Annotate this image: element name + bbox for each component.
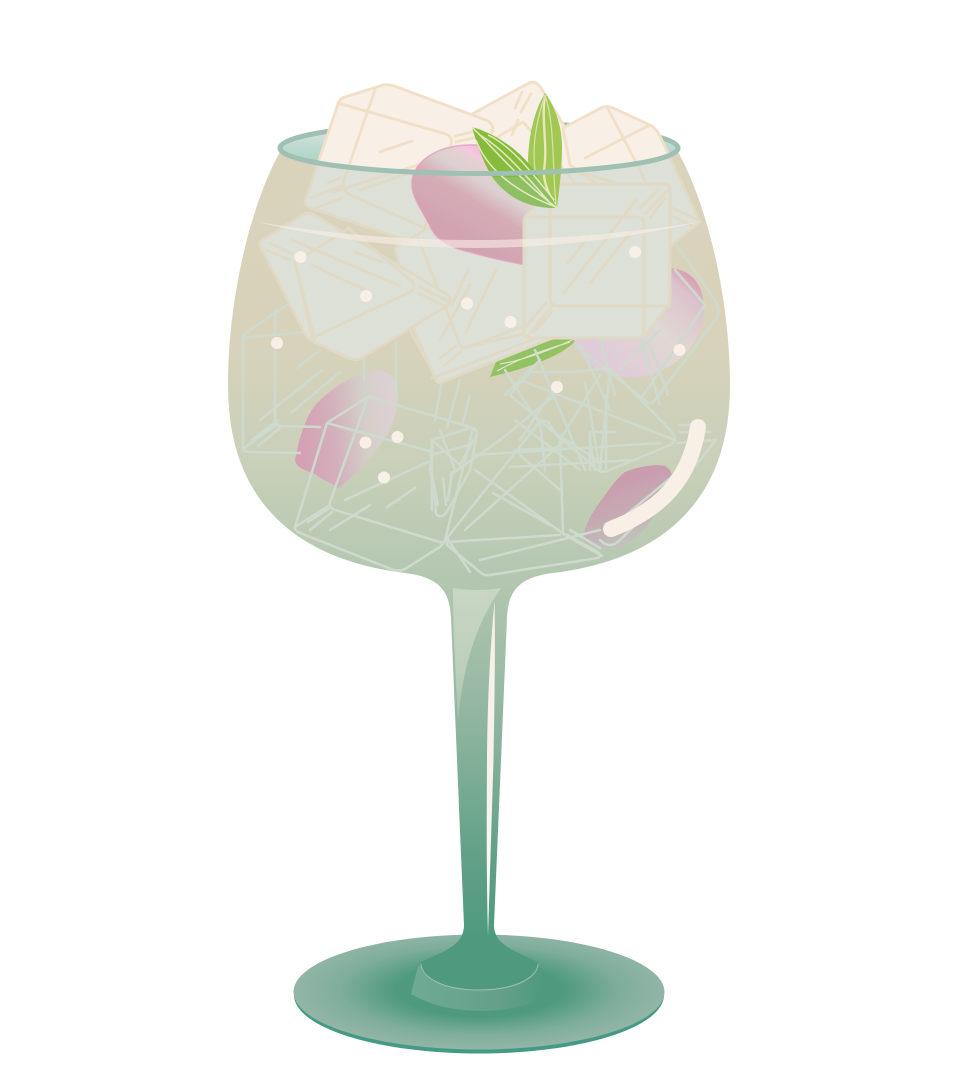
ice cube: right — [505, 360, 675, 472]
rose petal: bottom right — [584, 465, 672, 548]
ice cube: far left — [243, 305, 396, 453]
ice cubes: top, above rim — [317, 80, 670, 170]
glass reflection arc — [258, 222, 700, 248]
bubbles — [271, 246, 686, 484]
illustration: cocktail glass — [228, 80, 730, 1054]
ice cube: left tilted — [260, 213, 450, 360]
ice cube: small centre — [430, 380, 477, 516]
ice cube: lower centre — [447, 421, 660, 575]
stem highlight: cream sliver — [487, 601, 495, 936]
mint leaf: vertical — [528, 93, 562, 208]
rose petal: top — [412, 145, 545, 266]
rose petal: right — [572, 268, 704, 377]
ice cubes: top, inside glass — [304, 157, 701, 246]
mint leaf: lower — [490, 337, 575, 377]
foot highlight arc — [421, 964, 538, 990]
glass foot — [294, 934, 664, 1054]
stem highlight: left — [453, 588, 501, 722]
ice cube: lower left — [295, 397, 473, 570]
glass bowl and stem — [228, 150, 730, 990]
glass rim front — [280, 148, 678, 174]
glass highlight stroke — [611, 427, 698, 529]
ice cube: centre tilted — [395, 228, 560, 383]
ice cube: far right — [575, 243, 718, 545]
rose petal: lower left — [295, 370, 398, 488]
ice cube: middle cross — [450, 350, 600, 490]
mint leaf: left — [472, 127, 557, 208]
glass rim back — [280, 122, 678, 174]
submerged ice cubes outlines — [243, 243, 718, 575]
ice cube: front upright — [524, 184, 670, 338]
